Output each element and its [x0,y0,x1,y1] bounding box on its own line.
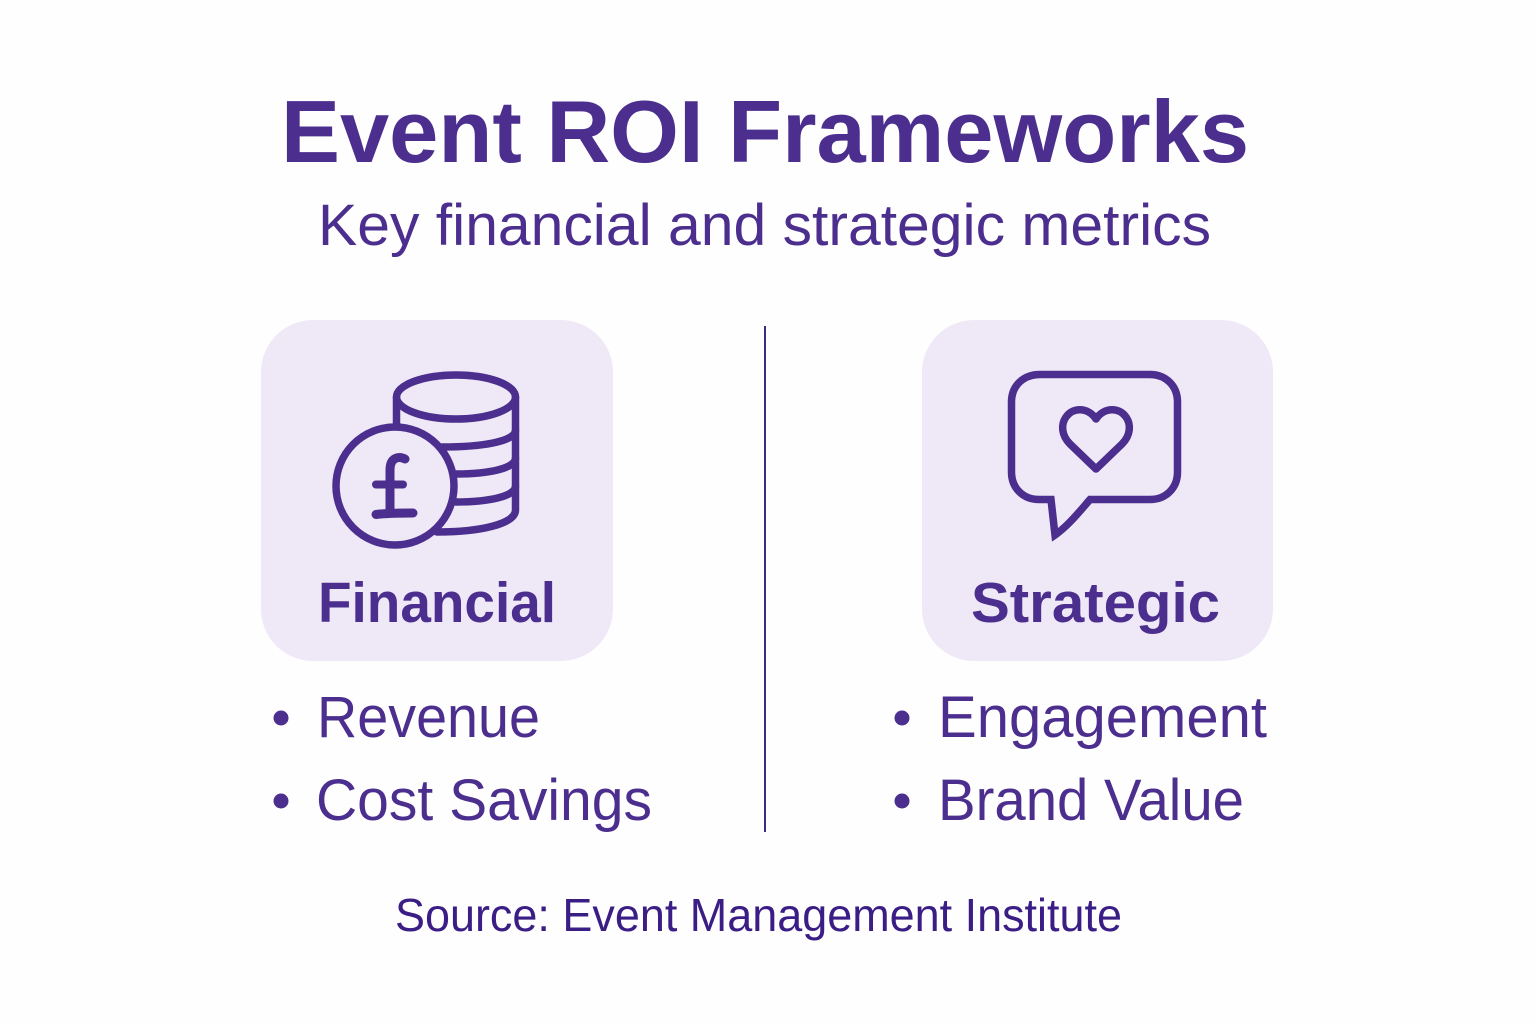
list: financial metrics: Cost Savings [316,768,652,833]
label: financial: Financial [318,571,556,635]
list: financial metrics: Revenue [317,685,540,750]
source note: Source: Event Management Institute [395,889,1122,941]
list: strategic metrics [894,685,1267,833]
list: strategic metrics: Brand Value [938,768,1244,833]
icon: speech bubble with heart [1012,374,1178,535]
title: Event ROI Frameworks [281,82,1249,181]
label: strategic: Strategic [971,571,1220,635]
divider [764,326,766,832]
panel: financial [261,320,613,661]
icon: pound coins [336,375,516,545]
panel: strategic [922,320,1273,661]
list: financial metrics [274,685,652,833]
subtitle: Key financial and strategic metrics [318,193,1211,258]
list: strategic metrics: Engagement [938,685,1267,750]
